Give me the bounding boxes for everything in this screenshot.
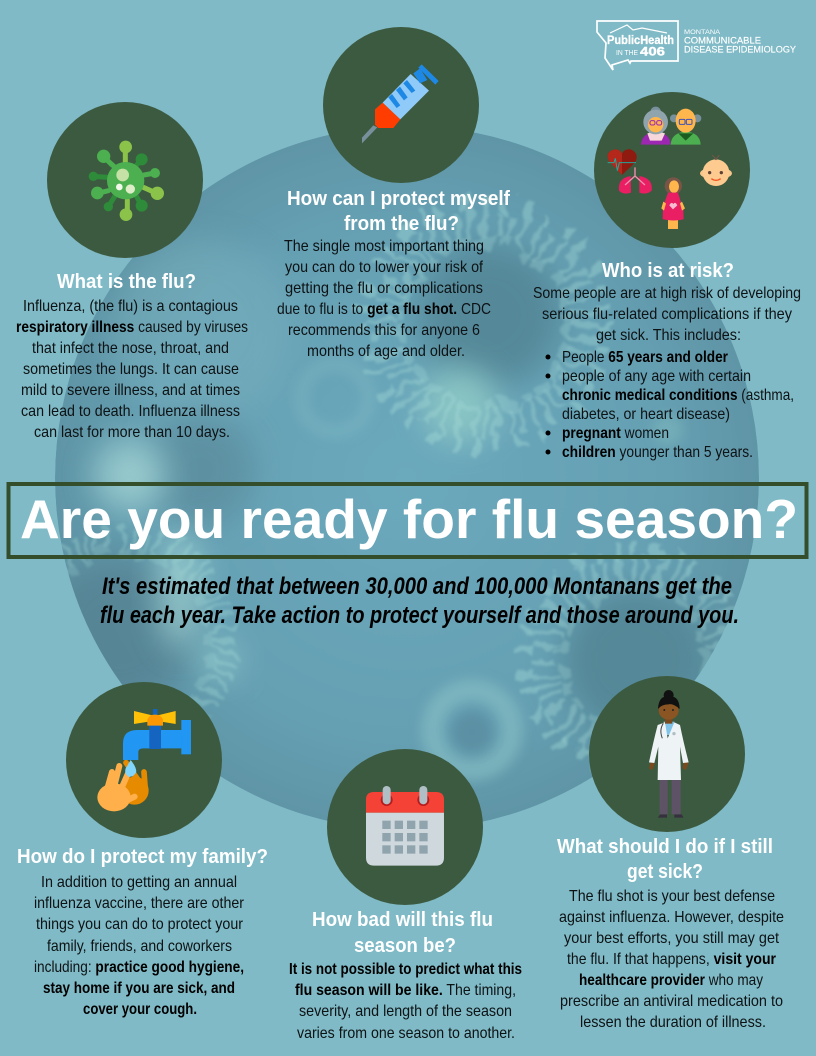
section: how bad will this flu season be: varies from one season to another. bbox=[297, 1025, 515, 1042]
logo: Public Health in the 406: IN THE bbox=[616, 50, 638, 57]
section: how can I protect myself: getting the flu or complications bbox=[285, 280, 483, 297]
section: how can I protect myself: How can I protect myself bbox=[287, 188, 510, 210]
section: how bad will this flu season be: How bad will this flu bbox=[312, 909, 493, 931]
section: how do I protect my family bbox=[17, 846, 268, 1018]
section: what is the flu bbox=[16, 271, 248, 441]
section: what is the flu: can last for more than 10 days. bbox=[34, 424, 230, 441]
title banner: Are you ready for flu season? bbox=[20, 488, 798, 550]
icon: hand washing under tap bbox=[66, 682, 222, 838]
icon: calendar bbox=[327, 749, 483, 905]
section: how do I protect my family: In addition to getting an annual bbox=[41, 874, 237, 891]
section: what is the flu: mild to severe illness, and at times bbox=[21, 382, 240, 399]
section: how bad will this flu season be: severity, and length of the season bbox=[299, 1003, 512, 1020]
section: what should I do if I still get sick: What should I do if I still bbox=[557, 836, 773, 858]
icon: virus bbox=[47, 102, 203, 258]
section: who is at risk: chronic medical conditions (asthma, bbox=[562, 387, 794, 404]
section: what is the flu: can lead to death. Influenza illness bbox=[21, 403, 240, 420]
logo: Public Health in the 406: COMMUNICABLE bbox=[684, 36, 761, 46]
section: who is at risk: children younger than 5 years. bbox=[562, 444, 753, 461]
section: what is the flu: What is the flu? bbox=[57, 271, 196, 293]
section: how can I protect myself: due to flu is to get a flu shot. CDC bbox=[277, 301, 491, 318]
section: how do I protect my family: influenza vaccine, there are other bbox=[34, 895, 245, 912]
section: who is at risk bbox=[533, 260, 801, 461]
section: who is at risk: get sick. This includes: bbox=[596, 327, 741, 344]
icon: at-risk people bbox=[594, 92, 750, 248]
logo: Public Health in the 406: MONTANA bbox=[684, 30, 720, 36]
section: how can I protect myself: you can do to lower your risk of bbox=[285, 259, 483, 276]
section: how do I protect my family: stay home if you are sick, and bbox=[43, 980, 235, 997]
section: how bad will this flu season be: It is not possible to predict what this bbox=[289, 961, 522, 978]
section: how bad will this flu season be: flu season will be like. The timing, bbox=[295, 982, 516, 999]
icon: syringe bbox=[323, 27, 479, 183]
section: how bad will this flu season be: season be? bbox=[354, 935, 456, 957]
subtitle statement bbox=[100, 573, 739, 629]
section: what is the flu: Influenza, (the flu) is a contagious bbox=[23, 298, 238, 315]
section: how do I protect my family: How do I protect my family? bbox=[17, 846, 268, 868]
section: how can I protect myself: months of age and older. bbox=[307, 343, 465, 360]
background virus micrograph circle bbox=[23, 126, 759, 830]
section: how bad will this flu season be bbox=[289, 909, 522, 1042]
section: how can I protect myself: The single most important thing bbox=[284, 238, 484, 255]
section: what should I do if I still get sick: against influenza. However, despite bbox=[559, 909, 784, 926]
section: who is at risk: diabetes, or heart disease) bbox=[562, 406, 730, 423]
section: how do I protect my family: including: practice good hygiene, bbox=[34, 959, 244, 976]
section: how can I protect myself: from the flu? bbox=[344, 213, 459, 235]
section: how can I protect myself bbox=[277, 188, 510, 360]
section: what should I do if I still get sick: healthcare provider who may bbox=[579, 972, 763, 989]
logo: Public Health in the 406 bbox=[597, 21, 796, 70]
section: what should I do if I still get sick: The flu shot is your best defense bbox=[569, 888, 775, 905]
icon: doctor bbox=[589, 676, 745, 832]
section: what should I do if I still get sick: get sick? bbox=[627, 861, 703, 883]
logo: Public Health in the 406: 406 bbox=[640, 44, 665, 58]
section: what is the flu: sometimes the lungs. It can cause bbox=[23, 361, 239, 378]
section: what is the flu: respiratory illness caused by viruses bbox=[16, 319, 248, 336]
section: how do I protect my family: cover your cough. bbox=[83, 1001, 197, 1018]
section: how do I protect my family: family, friends, and coworkers bbox=[47, 938, 232, 955]
section: what should I do if I still get sick bbox=[557, 836, 784, 1031]
section: how do I protect my family: things you can do to protect your bbox=[36, 916, 244, 933]
section: what should I do if I still get sick: the flu. If that happens, visit your bbox=[567, 951, 776, 968]
section: what should I do if I still get sick: lessen the duration of illness. bbox=[580, 1014, 766, 1031]
section: what is the flu: that infect the nose, throat, and bbox=[32, 340, 229, 357]
logo: Public Health in the 406: PublicHealth bbox=[607, 35, 674, 47]
section: what should I do if I still get sick: your best efforts, you still may get bbox=[564, 930, 780, 947]
logo: Public Health in the 406: DISEASE EPIDEMIOLOGY bbox=[684, 44, 796, 54]
section: who is at risk: people of any age with certain bbox=[562, 368, 751, 385]
section: what should I do if I still get sick: prescribe an antiviral medication to bbox=[560, 993, 783, 1010]
section: how can I protect myself: recommends this for anyone 6 bbox=[288, 322, 480, 339]
section: who is at risk: pregnant women bbox=[562, 425, 669, 442]
section: who is at risk: serious flu-related complications if they bbox=[542, 306, 792, 323]
section: who is at risk: People 65 years and older bbox=[562, 349, 728, 366]
section: who is at risk: Who is at risk? bbox=[602, 260, 734, 282]
